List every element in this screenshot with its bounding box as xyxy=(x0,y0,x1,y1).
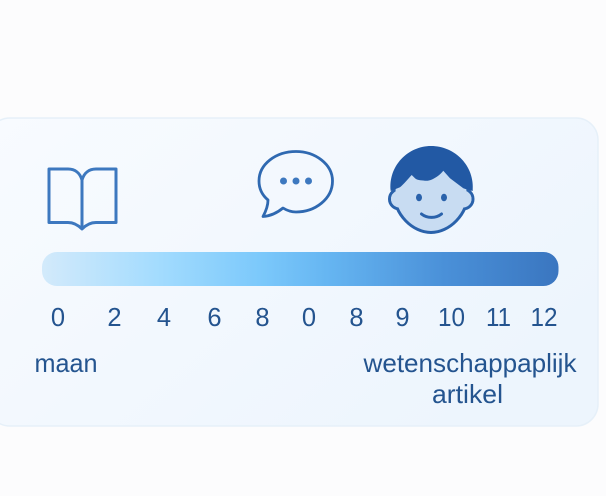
scale numbers: 0 xyxy=(302,304,316,332)
scale numbers: 2 xyxy=(107,304,122,332)
label: start of scale: maan xyxy=(34,348,98,378)
scale numbers: 4 xyxy=(157,304,171,332)
scale numbers: 0 xyxy=(51,304,65,332)
scale numbers: 10 xyxy=(438,304,465,332)
icon: child face xyxy=(390,146,473,232)
gradient bar xyxy=(42,252,558,286)
icon: speech bubble xyxy=(259,152,332,216)
scale numbers: 11 xyxy=(486,304,511,332)
scale numbers: 12 xyxy=(530,304,558,332)
panel: reading level scale xyxy=(0,118,598,426)
label: end of scale: wetenschappaplijk xyxy=(362,348,578,378)
label: end of scale: artikel xyxy=(432,379,503,409)
scale numbers: 8 xyxy=(255,304,270,332)
scale numbers: 6 xyxy=(207,304,222,332)
scale numbers xyxy=(51,304,558,332)
scale numbers: 8 xyxy=(349,304,364,332)
icon: open book xyxy=(49,169,116,229)
label: end of scale xyxy=(362,348,578,409)
scale numbers: 9 xyxy=(395,304,410,332)
